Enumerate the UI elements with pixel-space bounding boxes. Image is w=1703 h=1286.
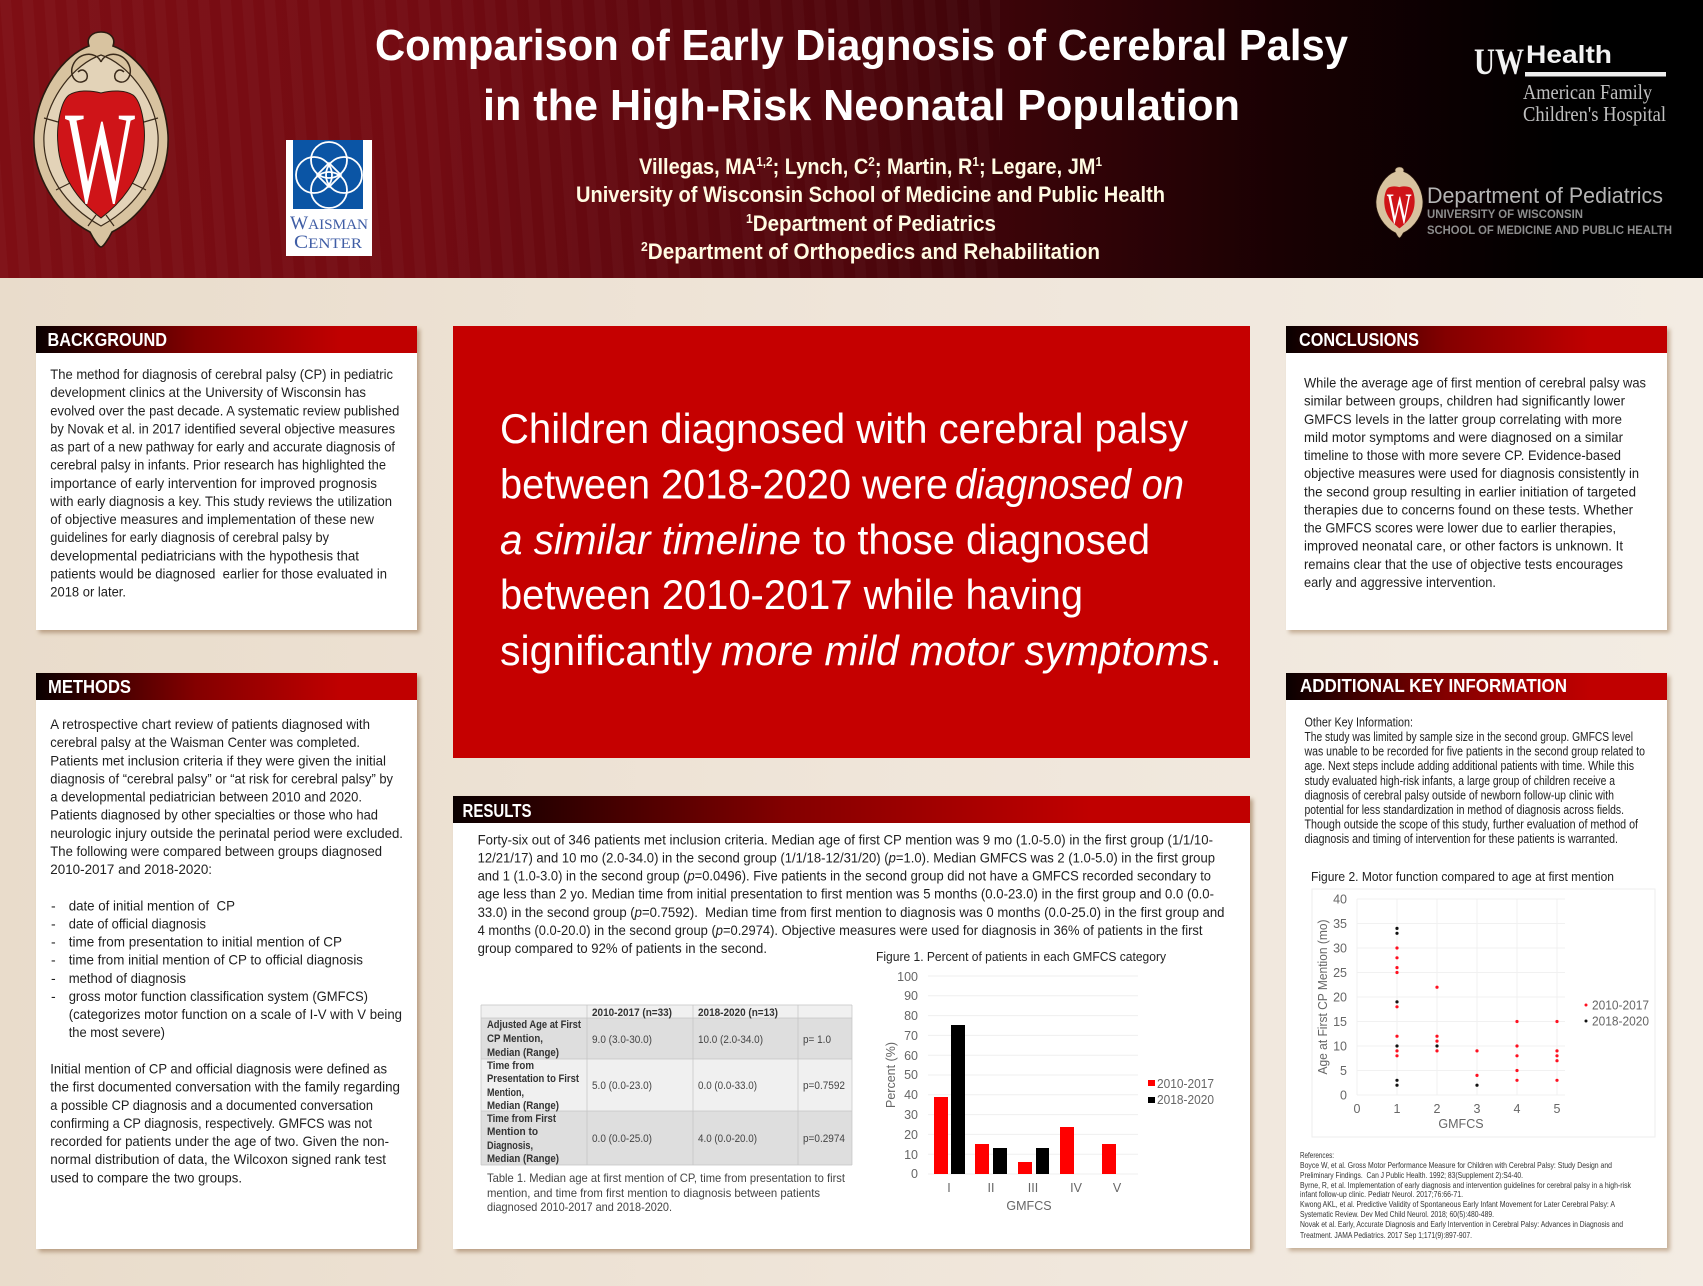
text: methods body: 2010-2017 and 2018-2020: (50, 861, 212, 877)
logo: Department of Pediatrics: SCHOOL OF MEDICINE AND PUBLIC HEALTH (1427, 225, 1672, 237)
title: in the High-Risk Neonatal Population (483, 81, 1240, 130)
authors and affiliations: Department of Pediatrics (753, 211, 996, 236)
text: background body: cerebral palsy in infants. Prior research has highlighted the (50, 457, 386, 473)
text: background body: with early diagnosis a key. This study reviews the utilization (49, 493, 392, 509)
list: compared measures: date of official diagnosis (69, 915, 206, 931)
bar chart: figure 1: 20 (904, 1128, 918, 1142)
logo: UW Health American Family Children's Hospital (1474, 41, 1666, 126)
text: background body: guidelines for early diagnosis of cerebral palsy by (50, 529, 329, 545)
table 1: 0.0 (0.0-25.0) (592, 1133, 652, 1145)
scatter chart: figure 2: 40 (1333, 892, 1347, 906)
text: conclusions body: objective measures were used for diagnosis consistently in (1304, 465, 1639, 481)
text: methods definitions: used to compare the two groups. (50, 1169, 242, 1185)
table 1: Mention, (487, 1087, 524, 1099)
authors and affiliations (576, 154, 1165, 264)
authors and affiliations: 2 (641, 239, 648, 254)
references: Boyce W, et al. Gross Motor Performance Measure for Children with Cerebral Palsy: Study Design and (1300, 1160, 1612, 1170)
bar chart: figure 1 (876, 949, 1214, 1213)
text: background body: by Novak et al. in 2017 identified several objective measures (50, 420, 395, 436)
panel: background (36, 326, 420, 633)
bar chart: figure 1: 90 (904, 989, 918, 1003)
icon: Waisman Center logo (286, 140, 372, 256)
table 1: Adjusted Age at First (487, 1019, 581, 1031)
text: methods definitions: a possible CP diagnosis and a documented conversation (50, 1097, 373, 1113)
logo: Department of Pediatrics (1376, 167, 1672, 238)
panel: key message callout (453, 326, 1250, 758)
table 1: CP Mention, (487, 1033, 543, 1045)
table 1: 9.0 (3.0-30.0) (592, 1034, 652, 1046)
bar chart: figure 1: I (947, 1181, 951, 1195)
text: methods body: diagnosis of “cerebral palsy” or “at risk for cerebral palsy” by (50, 770, 393, 786)
text: results body: Forty-six out of 346 patients met inclusion criteria. Median age of first CP mention was 9 mo (1.0-5.0) in the first group (1/1/10- (478, 831, 1213, 847)
scatter chart: figure 2: 30 (1333, 942, 1347, 956)
icon: Waisman Center logo: CENTER (294, 232, 362, 253)
text: methods body: A retrospective chart review of patients diagnosed with (50, 716, 370, 732)
text: background body: development clinics at the University of Wisconsin has (50, 384, 366, 400)
table 1 caption: Table 1. Median age at first mention of CP, time from presentation to first (487, 1172, 846, 1185)
icon: Waisman Center logo: WAISMAN (290, 213, 368, 234)
references: Preliminary Findings. Can J Public Health. 1992; 83(Supplement 2):S4-40. (1300, 1170, 1523, 1180)
text: conclusions body: timeline to those with more severe CP. Evidence-based (1304, 447, 1621, 463)
text: other key information: diagnosis of cerebral palsy outside of newborn follow-up clinic with (1304, 788, 1614, 802)
references: Treatment. JAMA Pediatrics. 2017 Sep 1;171(9):897-907. (1300, 1230, 1472, 1240)
title: Comparison of Early Diagnosis of Cerebral Palsy (375, 21, 1348, 70)
scatter chart: figure 2 (1311, 869, 1655, 1137)
text: other key information: was unable to be recorded for five patients in the second group related to (1304, 745, 1645, 759)
table 1: Time from (487, 1060, 534, 1072)
text: methods definitions: normal distribution of data, the Wilcoxon signed rank test (50, 1151, 386, 1167)
bar chart: figure 1: GMFCS (1006, 1199, 1052, 1213)
panel: key message callout: a similar timeline (500, 516, 801, 563)
text: results body: and 1 (1.0-3.0) in the second group (p=0.0496). Five patients in the second group did not have a GMFCS recorded secondary to (478, 868, 1211, 884)
text: other key information: Though outside the scope of this study, further evaluation of method of (1304, 817, 1638, 831)
panel: key message callout: to those diagnosed (813, 516, 1150, 563)
text: results body: age less than 2 yo. Median time from initial presentation to first mention was 5 months (0.0-23.0) in the first group and 0.0 (0.0- (478, 886, 1214, 902)
text: background body: evolved over the past decade. A systematic review published (50, 402, 399, 418)
table 1: Median (Range) (487, 1047, 559, 1059)
text: methods definitions: confirming a CP diagnosis, respectively. GMFCS was not (50, 1115, 372, 1131)
references: Byrne, R, et al. Implementation of early diagnosis and intervention guidelines for cerebral palsy in a high-risk (1300, 1180, 1632, 1190)
scatter chart: figure 2: 2 (1434, 1102, 1441, 1116)
scatter chart: figure 2: 35 (1333, 917, 1347, 931)
list: compared measures: - (51, 934, 56, 950)
logo: UW Health American Family Children's Hospital: American Family (1523, 80, 1652, 104)
scatter chart: figure 2: 3 (1474, 1102, 1481, 1116)
panel: key message callout: . (1210, 627, 1222, 674)
panel: key message callout: diagnosed on (955, 460, 1184, 508)
text: methods body: The following were compared between groups diagnosed (50, 843, 382, 859)
text: conclusions body: GMFCS levels in the latter group correlating with more (1304, 411, 1622, 427)
icon: University of Wisconsin crest (34, 32, 168, 247)
text: methods definitions: recorded for patients under the age of two. Given the non- (50, 1133, 389, 1149)
heading: results: RESULTS (462, 801, 532, 821)
scatter chart: figure 2: Age at First CP Mention (mo) (1316, 920, 1330, 1074)
scatter chart: figure 2: 2018-2020 (1592, 1014, 1649, 1028)
panel: additional key information (1286, 673, 1670, 1251)
bar chart: figure 1: 50 (904, 1068, 918, 1082)
authors and affiliations: 1 (1095, 154, 1102, 169)
text: other key information: age. Next steps include adding additional patients with time. While this (1304, 759, 1634, 773)
table 1: Diagnosis, (487, 1140, 533, 1152)
scatter chart: figure 2: 1 (1394, 1102, 1401, 1116)
table 1 (481, 1005, 852, 1165)
header banner (0, 0, 1703, 278)
table 1 caption: mention, and time from first mention to diagnosis between patients (487, 1187, 820, 1200)
scatter chart: figure 2: 4 (1514, 1102, 1521, 1116)
text: other key information: study evaluated high-risk infants, a large group of children receive a (1304, 774, 1615, 788)
text: methods body: a developmental pediatrician between 2010 and 2020. (50, 788, 362, 804)
authors and affiliations: 1 (972, 154, 979, 169)
scatter chart: figure 2: 0 (1354, 1102, 1361, 1116)
logo: Department of Pediatrics: UNIVERSITY OF WISCONSIN (1427, 209, 1583, 221)
table 1: Time from First (487, 1113, 556, 1125)
text: other key information: diagnosis and timing of intervention for these patients is warranted. (1304, 832, 1618, 846)
panel: results (453, 796, 1253, 1252)
authors and affiliations: ; Lynch, C (773, 154, 868, 179)
text: methods body: Patients diagnosed by other specialties or those who had (50, 807, 378, 823)
bar chart: figure 1: II (988, 1181, 994, 1195)
list: compared measures: - (51, 952, 56, 968)
list: compared measures: - (51, 915, 56, 931)
panel: key message callout: between 2010-2017 while having (500, 571, 1083, 618)
text: other key information (1304, 716, 1645, 846)
text: results body: 33.0) in the second group (p=0.7592). Median time from first mention to diagnosis was 0 months (0.0-25.0) in the first group and (478, 904, 1225, 920)
text: results body: group compared to 92% of patients in the second. (478, 940, 767, 956)
bar chart: figure 1: 60 (904, 1049, 918, 1063)
heading: methods: METHODS (48, 677, 131, 697)
text: background body (49, 366, 399, 600)
table 1 caption (487, 1172, 846, 1214)
text: methods body: cerebral palsy at the Waisman Center was completed. (50, 734, 360, 750)
list: compared measures: time from initial mention of CP to official diagnosis (69, 952, 363, 968)
list: compared measures: - (51, 970, 56, 986)
text: conclusions body: therapies due to concerns found on these tests. Whether (1304, 501, 1633, 517)
references: Kwong AKL, et al. Predictive Validity of Spontaneous Early Infant Movement for Later Cerebral Palsy: A (1300, 1199, 1615, 1209)
text: conclusions body: the GMFCS scores were lower due to earlier therapies, (1304, 520, 1616, 536)
scatter chart: figure 2: GMFCS (1438, 1117, 1484, 1131)
list: compared measures: time from presentation to initial mention of CP (69, 934, 342, 950)
bar chart: figure 1: IV (1070, 1181, 1083, 1195)
table 1: Median (Range) (487, 1100, 559, 1112)
text: methods definitions: the first documented conversation with the family regarding (50, 1079, 400, 1095)
scatter chart: figure 2: 10 (1333, 1040, 1347, 1054)
table 1: 4.0 (0.0-20.0) (698, 1133, 757, 1145)
table 1: 5.0 (0.0-23.0) (592, 1080, 652, 1092)
bar chart: figure 1: 80 (904, 1009, 918, 1023)
text: background body: of objective measures and implementation of these new (50, 511, 375, 527)
references: Novak et al. Early, Accurate Diagnosis and Early Intervention in Cerebral Palsy: Advances in Diagnosis and (1300, 1219, 1623, 1229)
text: background body: as part of a new pathway for early and accurate diagnosis of (50, 438, 395, 454)
scatter chart: figure 2: 0 (1340, 1088, 1347, 1102)
table 1: p=0.2974 (803, 1133, 845, 1145)
icon: University of Wisconsin crest: W (65, 84, 135, 231)
bar chart: figure 1: 40 (904, 1088, 918, 1102)
text: methods body: neurologic injury outside the perinatal period were excluded. (50, 825, 403, 841)
table 1: Presentation to First (487, 1073, 579, 1085)
list: compared measures (51, 897, 402, 1040)
heading: additional key information: ADDITIONAL KEY INFORMATION (1300, 676, 1567, 696)
bar chart: figure 1: III (1028, 1181, 1038, 1195)
text: background body: importance of early intervention for improved prognosis (50, 475, 377, 491)
heading: background: BACKGROUND (48, 330, 167, 350)
scatter chart: figure 2: 25 (1333, 966, 1347, 980)
table 1: 10.0 (2.0-34.0) (698, 1034, 763, 1046)
authors and affiliations: University of Wisconsin School of Medicine and Public Health (576, 182, 1165, 207)
bar chart: figure 1: Figure 1. Percent of patients in each GMFCS category (876, 949, 1166, 964)
text: methods body: Patients met inclusion criteria if they were given the initial (50, 752, 386, 768)
table 1: 0.0 (0.0-33.0) (698, 1080, 757, 1092)
text: background body: developmental pediatricians with the hypothesis that (50, 547, 359, 563)
bar chart: figure 1: 0 (911, 1167, 918, 1181)
text: conclusions body: improved neonatal care, or other factors is unknown. It (1304, 538, 1623, 554)
scatter chart: figure 2: 5 (1554, 1102, 1561, 1116)
panel: key message callout: Children diagnosed with cerebral palsy (500, 405, 1188, 452)
table 1: 2018-2020 (n=13) (698, 1007, 778, 1019)
authors and affiliations: ; Legare, JM (979, 154, 1095, 179)
authors and affiliations: Villegas, MA (639, 154, 768, 179)
list: compared measures: the most severe) (69, 1024, 165, 1040)
panel: conclusions (1286, 326, 1670, 633)
text: other key information: potential for less standardization in method of diagnosis across fields. (1304, 803, 1624, 817)
text: results body: 4 months (0.0-20.0) in the second group (p=0.2974). Objective measures were used for diagnosis in 36% of patients in the first (478, 922, 1203, 938)
text: conclusions body: remains clear that the use of objective tests encourages (1304, 556, 1623, 572)
list: compared measures: gross motor function classification system (GMFCS) (69, 988, 368, 1004)
text: conclusions body: While the average age of first mention of cerebral palsy was (1304, 374, 1646, 390)
references: Systematic Review. Dev Med Child Neurol. 2018; 60(5):480-489. (1300, 1209, 1494, 1219)
bar chart: figure 1: 70 (904, 1029, 918, 1043)
bar chart: figure 1: 2018-2020 (1157, 1093, 1214, 1107)
table 1 caption: diagnosed 2010-2017 and 2018-2020. (487, 1201, 672, 1214)
table 1: Mention to (487, 1126, 538, 1138)
text: methods definitions (50, 1060, 400, 1185)
list: compared measures: date of initial mention of CP (69, 897, 235, 913)
scatter chart: figure 2: 2010-2017 (1592, 998, 1649, 1012)
logo: Department of Pediatrics: W (1387, 184, 1412, 233)
table 1: p= 1.0 (803, 1034, 831, 1046)
authors and affiliations: 1 (746, 211, 753, 226)
logo: UW Health American Family Children's Hospital: Health (1526, 41, 1612, 69)
text: conclusions body: similar between groups, children had significantly lower (1304, 393, 1625, 409)
logo: UW Health American Family Children's Hospital: UW (1474, 42, 1524, 83)
panel: key message callout: more mild motor symptoms (721, 627, 1209, 674)
text: other key information: Other Key Information: (1304, 716, 1413, 730)
bar chart: figure 1: V (1113, 1181, 1122, 1195)
panel: methods (36, 673, 420, 1252)
text: background body: patients would be diagnosed earlier for those evaluated in (50, 565, 387, 581)
authors and affiliations: Department of Orthopedics and Rehabilitation (648, 239, 1100, 264)
text: conclusions body: the second group resulting in earlier initiation of targeted (1304, 483, 1636, 499)
heading: conclusions: CONCLUSIONS (1299, 330, 1419, 350)
table 1: Median (Range) (487, 1153, 559, 1165)
references: infant follow-up clinic. Pediatr Neurol. 2017;76:66-71. (1300, 1189, 1463, 1199)
text: background body: 2018 or later. (50, 584, 126, 600)
text: results body (478, 831, 1225, 956)
text: other key information: The study was limited by sample size in the second group. GMFCS level (1304, 730, 1633, 744)
bar chart: figure 1: 10 (904, 1148, 918, 1162)
table 1: p=0.7592 (803, 1080, 845, 1092)
logo: UW Health American Family Children's Hospital: Children's Hospital (1523, 102, 1666, 126)
table 1: 2010-2017 (n=33) (592, 1007, 672, 1019)
title (375, 21, 1348, 130)
text: conclusions body: mild motor symptoms and were diagnosed on a similar (1304, 429, 1623, 445)
text: results body: 12/21/17) and 10 mo (2.0-34.0) in the second group (1/1/18-12/31/20) (p=1.0). Median GMFCS was 2 (1.0-5.0) in the first group (478, 849, 1215, 865)
authors and affiliations: 1,2 (756, 154, 773, 169)
references (1300, 1150, 1632, 1240)
references: References: (1300, 1150, 1334, 1160)
panel: key message callout: between 2018-2020 were (500, 460, 948, 508)
bar chart: figure 1: Percent (%) (884, 1042, 898, 1108)
scatter chart: figure 2: Figure 2. Motor function compared to age at first mention (1311, 869, 1614, 884)
bar chart: figure 1: 2010-2017 (1157, 1077, 1214, 1091)
text: methods body (50, 716, 403, 877)
logo: Department of Pediatrics: Department of Pediatrics (1427, 183, 1663, 208)
bar chart: figure 1: 30 (904, 1108, 918, 1122)
bar chart: figure 1: 100 (897, 970, 918, 984)
text: background body: The method for diagnosis of cerebral palsy (CP) in pediatric (50, 366, 393, 382)
text: conclusions body: early and aggressive intervention. (1304, 574, 1496, 590)
authors and affiliations: 2 (868, 154, 875, 169)
scatter chart: figure 2: 20 (1333, 990, 1347, 1004)
list: compared measures: - (51, 988, 56, 1004)
authors and affiliations: ; Martin, R (875, 154, 973, 179)
panel: key message callout: significantly (500, 627, 712, 674)
text: methods definitions: Initial mention of CP and official diagnosis were defined as (50, 1060, 387, 1076)
text: conclusions body (1304, 374, 1646, 590)
scatter chart: figure 2: 15 (1333, 1015, 1347, 1029)
scatter chart: figure 2: 5 (1340, 1064, 1347, 1078)
list: compared measures: method of diagnosis (69, 970, 186, 986)
list: compared measures: - (51, 897, 56, 913)
list: compared measures: (categorizes motor function on a scale of I-V with V being (69, 1006, 402, 1022)
